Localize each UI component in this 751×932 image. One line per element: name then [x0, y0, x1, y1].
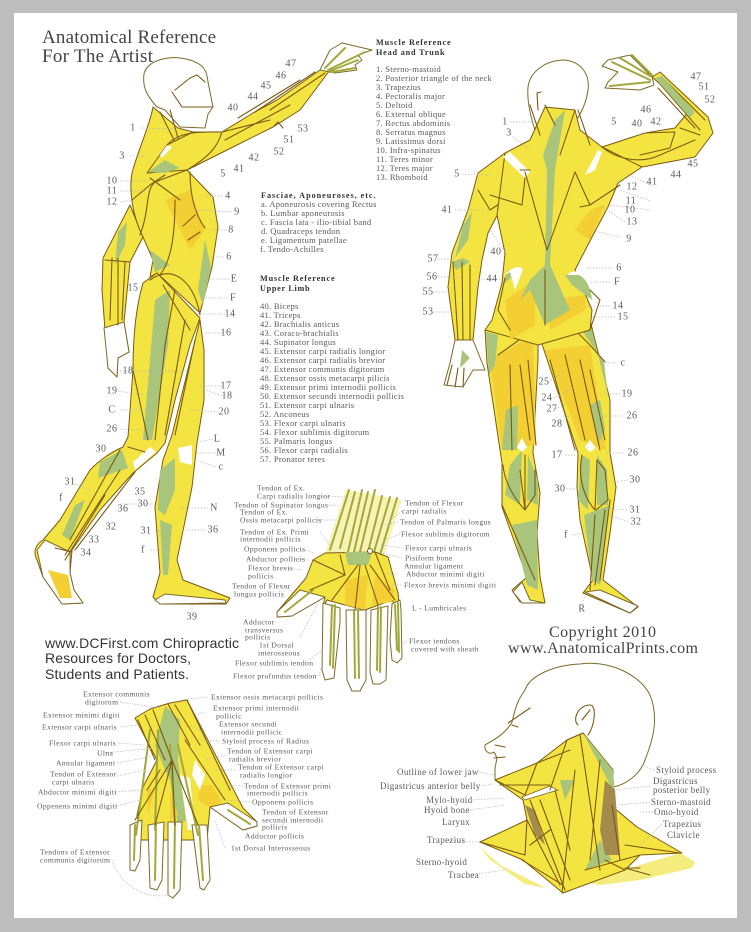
- figure labels: back view: 57: [428, 254, 438, 264]
- labels: palm of hand: pollicis: [245, 632, 270, 642]
- figure labels: side view: 10: [106, 176, 118, 186]
- figure labels: side view: 9: [234, 206, 240, 218]
- head outline: [528, 60, 588, 130]
- palm: [277, 552, 400, 617]
- text block: fasciae and aponeuroses: [260, 191, 377, 254]
- text block: muscle reference head and trunk: 6. External oblique: [376, 109, 446, 119]
- figure labels: back view: 32: [630, 516, 642, 528]
- figure labels: back view: 14: [612, 300, 624, 312]
- text block: muscle reference upper limb: [260, 274, 404, 464]
- labels: palm of hand: Annular ligament: [404, 562, 464, 570]
- labels: back of hand: pollicic: [216, 712, 242, 720]
- labels: back of hand: radialis longior: [240, 770, 292, 780]
- forearm tendons: [325, 490, 402, 556]
- head outline: [144, 58, 213, 128]
- figure labels: back view: 53: [422, 306, 434, 318]
- figure labels: back view: 46: [640, 104, 652, 116]
- labels: palm of hand: Ossis metacarpi pollicis: [240, 516, 322, 524]
- labels: head and neck: Sterno-mastoid: [651, 797, 711, 807]
- figure labels: side view: 16: [220, 328, 232, 338]
- title: Anatomical Reference: [42, 27, 216, 48]
- text block: muscle reference head and trunk: 10. Infra-spinatus: [376, 145, 441, 155]
- figure labels: side view: 15: [128, 282, 138, 294]
- figure labels: back view: 30: [630, 474, 640, 486]
- figure labels: back view: F: [614, 276, 620, 288]
- text block: fasciae and aponeuroses: a. Aponeurosis covering Rectus: [261, 199, 377, 209]
- figure labels: back view: 51: [698, 82, 710, 92]
- text block: DCFirst chiropractic resources: Resources for Doctors,: [45, 650, 191, 666]
- labels: head and neck: Trapezius: [663, 819, 701, 829]
- title: [42, 27, 216, 67]
- labels: palm of hand: Carpi radialis longior: [257, 492, 330, 500]
- figure labels: side view: 32: [106, 522, 116, 532]
- figure labels: back view: 44: [670, 170, 682, 180]
- labels: palm of hand: Tendon of Flexor: [405, 498, 464, 508]
- text block: muscle reference head and trunk: 1. Sterno-mastoid: [376, 64, 442, 74]
- figure labels: side view: 40: [228, 102, 238, 114]
- labels: back of hand: Extensor primi internodii: [213, 704, 299, 712]
- labels: back of hand: Flexor carpi ulnaris: [49, 738, 116, 748]
- hanging arm: [102, 205, 143, 377]
- raised hand: [320, 43, 372, 73]
- labels: back of hand: Extensor secundi: [219, 720, 277, 728]
- labels: back of hand: Annular ligament: [56, 758, 116, 768]
- figure labels: back view: 41: [646, 176, 658, 188]
- text block: muscle reference upper limb: 53. Flexor carpi ulnaris: [260, 418, 346, 428]
- figure labels: back view: 40: [632, 118, 642, 130]
- labels: back of hand: Tendon of Extensor carpi: [227, 746, 313, 756]
- labels: head and neck: Trachea: [448, 870, 479, 880]
- text block: copyright: [508, 624, 699, 657]
- figure labels: side view: 33: [88, 534, 100, 546]
- labels: palm of hand: Adductor: [243, 618, 275, 626]
- labels: back of hand: carpi ulnaris: [52, 778, 95, 786]
- figure labels: side view: 34: [80, 548, 92, 558]
- figure labels: side view: 26: [106, 424, 118, 434]
- figure labels: side view: 30: [138, 498, 148, 510]
- trunk: [131, 107, 218, 313]
- figure labels: side view: F: [230, 292, 236, 304]
- text block: muscle reference upper limb: 57. Pronator teres: [260, 454, 325, 464]
- fingers: [322, 603, 340, 680]
- labels: back of hand: Opponens pollicis: [252, 798, 314, 806]
- figure labels: back view: 27: [546, 404, 558, 414]
- figure labels: back view: f: [564, 530, 568, 540]
- labels: head and neck: Digastricus: [653, 776, 698, 786]
- labels: palm of hand: Tendon of Palmaris longus: [400, 518, 491, 526]
- figure labels: side view: 42: [248, 152, 260, 164]
- figure labels: back view: 47: [690, 72, 702, 82]
- text block: muscle reference head and trunk: 13. Rhomboid: [376, 172, 428, 182]
- figure labels: side view: 52: [274, 146, 284, 158]
- text block: muscle reference head and trunk: Head and Trunk: [376, 48, 445, 57]
- figure labels: side view: f: [59, 492, 63, 504]
- fingers: [130, 820, 142, 871]
- figure labels: side view: [59, 58, 308, 622]
- labels: palm of hand: Tendon of Ex.: [257, 484, 305, 492]
- figure labels: side view: C: [108, 404, 116, 416]
- figure: head and neck: [480, 663, 695, 893]
- labels: palm of hand: Opponens pollicis: [244, 544, 306, 554]
- text block: muscle reference head and trunk: 9. Latissimus dorsi: [376, 136, 446, 146]
- labels: palm of hand: Flexor sublimis tendon: [235, 658, 313, 668]
- figure labels: back view: 52: [704, 94, 716, 106]
- figure labels: side view: M: [216, 448, 226, 458]
- right hanging arm: [448, 153, 505, 340]
- raised arm: [147, 70, 330, 173]
- labels: back of hand: Tendon of Extensor: [50, 770, 117, 778]
- text block: muscle reference head and trunk: 5. Deltoid: [376, 100, 413, 110]
- figure labels: back view: 41: [442, 204, 452, 216]
- figure labels: back view: 26: [626, 410, 638, 422]
- figure labels: back view: 6: [616, 262, 622, 274]
- text block: fasciae and aponeuroses: f. Tendo-Achilles: [260, 244, 324, 254]
- figure labels: back view: 17: [552, 450, 562, 460]
- text block: muscle reference upper limb: 46. Extensor carpi radialis brevior: [260, 355, 385, 365]
- labels: back of hand: Tendon of Extensor primi: [244, 782, 331, 790]
- figure labels: side view: 4: [225, 190, 231, 202]
- labels: back of hand: Ulna: [97, 748, 114, 758]
- figure labels: side view: 41: [234, 164, 244, 174]
- trunk: [485, 107, 642, 345]
- labels: back of hand: Extensor carpi ulnaris: [42, 722, 117, 732]
- figure labels: side view: 5: [220, 168, 226, 180]
- figure labels: side view: 18: [222, 390, 232, 402]
- figure labels: side view: 35: [134, 486, 146, 498]
- labels: palm of hand: L - Lumbricales: [412, 604, 466, 612]
- title: For The Artist: [42, 46, 154, 67]
- figure labels: side view: 39: [186, 612, 198, 622]
- figure labels: side view: 47: [286, 58, 296, 70]
- neck muscles: [480, 733, 682, 893]
- labels: palm of hand: Tendon of Flexor: [232, 582, 291, 590]
- text block: muscle reference upper limb: 47. Extensor communis digitorum: [260, 364, 385, 374]
- text block: fasciae and aponeuroses: c. Fascia lata - ilio-tibial band: [261, 217, 372, 227]
- labels: back of hand: Abductor minimi digiti: [38, 788, 117, 796]
- figure labels: back view: 24: [542, 392, 552, 404]
- figure labels: back view: [422, 72, 716, 614]
- text block: fasciae and aponeuroses: b. Lumbar aponeurosis: [261, 208, 345, 218]
- face details: [172, 75, 212, 107]
- wrist and back of hand: [135, 700, 257, 840]
- figure labels: back view: 26: [628, 448, 638, 458]
- figure labels: back view: 13: [626, 216, 638, 228]
- text block: muscle reference upper limb: 50. Extensor secundi internodii pollicis: [260, 391, 404, 401]
- figure labels: side view: c: [219, 462, 224, 472]
- figure: back view: [444, 55, 713, 613]
- labels: back of hand: Adductor pollicis: [245, 832, 304, 840]
- labels: palm of hand: covered with sheath: [411, 644, 479, 654]
- labels: palm of hand: Flexor brevis: [248, 564, 293, 572]
- figure labels: side view: L: [214, 434, 220, 444]
- labels: head and neck: Clavicle: [667, 830, 700, 840]
- figure labels: side view: 31: [64, 476, 76, 488]
- figure labels: side view: 6: [226, 252, 232, 262]
- figure labels: back view: 12: [626, 182, 638, 192]
- figure labels: back view: 15: [618, 312, 628, 322]
- ear: [576, 705, 594, 735]
- figure labels: side view: 3: [119, 150, 125, 162]
- labels: palm of hand: Flexor brevis minimi digiti: [404, 580, 496, 590]
- text block: muscle reference head and trunk: 8. Serratus magnus: [376, 127, 446, 137]
- figure labels: back view: 28: [552, 418, 562, 430]
- text block: muscle reference upper limb: 48. Extensor ossis metacarpi pilicis: [260, 373, 390, 383]
- labels: head and neck: Trapezius: [427, 835, 465, 845]
- labels: back of hand: Oppenens minimi digiti: [37, 802, 118, 810]
- text block: copyright: www.AnatomicalPrints.com: [508, 640, 699, 657]
- text block: muscle reference upper limb: 52. Anconeus: [260, 409, 310, 419]
- labels: back of hand: 1st Dorsal Interosseous: [231, 844, 311, 852]
- text block: muscle reference upper limb: 42. Brachialis anticus: [260, 319, 339, 329]
- figure labels: side view: 45: [260, 80, 272, 92]
- labels: palm of hand: interosseous: [258, 648, 300, 658]
- standing leg: [153, 320, 230, 604]
- labels: back of hand: internodii pollicis: [247, 788, 308, 798]
- raised arm: [602, 72, 713, 167]
- labels: head and neck: Digastricus anterior belly: [380, 781, 481, 791]
- figure labels: side view: 51: [284, 134, 294, 146]
- text block: muscle reference head and trunk: 4. Pectoralis major: [376, 91, 445, 101]
- labels: palm of hand: Tendon of Ex.: [240, 508, 288, 516]
- figure labels: back view: 40: [490, 246, 502, 258]
- text block: muscle reference head and trunk: 11. Teres minor: [376, 154, 433, 164]
- figure labels: back view: c: [621, 358, 626, 368]
- labels: back of hand: digitorum: [85, 698, 118, 706]
- figure labels: back view: R: [578, 604, 586, 614]
- figure labels: side view: E: [231, 274, 237, 284]
- labels: head and neck: Larynx: [442, 817, 470, 827]
- text block: muscle reference upper limb: 49. Extensor primi internodii pollicis: [260, 382, 396, 392]
- labels: back of hand: Styloid process of Radius: [222, 736, 309, 746]
- labels: head and neck: Omo-hyoid: [654, 807, 699, 817]
- labels: palm of hand: Pisiform bone: [405, 554, 453, 562]
- figure labels: back view: 30: [554, 484, 566, 494]
- raised hand: [602, 55, 654, 90]
- figure labels: back view: 10: [624, 204, 636, 216]
- labels: palm of hand: Abductor minimi digiti: [406, 570, 485, 578]
- text block: muscle reference head and trunk: [376, 38, 493, 182]
- figure labels: back view: 3: [506, 128, 512, 138]
- figure labels: back view: 45: [688, 158, 698, 170]
- labels: back of hand: internodii pollicic: [221, 728, 283, 736]
- labels: palm of hand: [232, 484, 496, 680]
- text block: muscle reference upper limb: 43. Coraco-brachialis: [260, 328, 339, 338]
- figure labels: side view: 1: [130, 122, 136, 134]
- labels: back of hand: pollicis: [262, 822, 287, 832]
- figure labels: back view: 19: [622, 388, 632, 400]
- text block: muscle reference upper limb: 55. Palmaris longus: [260, 436, 332, 446]
- figure labels: back view: 5: [454, 168, 460, 180]
- labels: back of hand: Tendons of Extensor: [40, 848, 110, 856]
- figure: back of hand: [130, 700, 257, 898]
- figure: side view running man: [35, 43, 372, 604]
- text block: muscle reference head and trunk: 2. Posterior triangle of the neck: [376, 73, 493, 83]
- labels: palm of hand: Tendon of Supinator longus: [234, 500, 328, 510]
- text block: fasciae and aponeuroses: Fasciae, Aponeuroses, etc.: [261, 191, 376, 200]
- figure labels: back view: 5: [611, 116, 617, 128]
- figure labels: side view: 8: [228, 224, 234, 236]
- figure labels: side view: 20: [218, 406, 230, 418]
- figure labels: side view: 53: [298, 124, 308, 134]
- head outline: [485, 663, 655, 787]
- text block: copyright: Copyright 2010: [549, 624, 656, 641]
- figure labels: side view: 12: [106, 196, 118, 208]
- figure labels: back view: 56: [426, 272, 438, 282]
- labels: head and neck: Sterno-hyoid: [416, 857, 467, 867]
- text block: muscle reference head and trunk: 3. Trapezius: [376, 82, 421, 92]
- figure labels: back view: 55: [422, 286, 434, 298]
- figure labels: back view: 25: [538, 376, 550, 388]
- labels: back of hand: Tendon of Extensor: [262, 808, 329, 816]
- labels: palm of hand: carpi radialis: [402, 506, 447, 516]
- figure labels: back view: 11: [626, 196, 636, 206]
- labels: head and neck: posterior belly: [653, 785, 711, 795]
- text block: muscle reference upper limb: 41. Triceps: [260, 310, 301, 320]
- pale skin below neck: [480, 847, 695, 888]
- labels: back of hand: communis digitorum: [40, 856, 110, 864]
- labels: palm of hand: Abductor pollicis: [246, 554, 305, 564]
- figure labels: back view: 42: [650, 116, 662, 128]
- figure labels: side view: 19: [106, 386, 118, 396]
- text block: muscle reference upper limb: 54. Flexor sublimis digitorum: [260, 427, 369, 437]
- labels: back of hand: Extensor communis: [83, 690, 150, 698]
- text block: muscle reference upper limb: Muscle Reference: [260, 274, 335, 283]
- labels: back of hand: Extensor ossis metacarpi pollicis: [211, 692, 323, 702]
- text block: muscle reference upper limb: Upper Limb: [260, 284, 310, 293]
- text block: muscle reference upper limb: 45. Extensor carpi radialis longior: [260, 346, 385, 356]
- eye and mouth: [494, 708, 530, 758]
- figure labels: side view: 11: [107, 186, 117, 196]
- text block: DCFirst chiropractic resources: www.DCFirst.com Chiropractic: [44, 635, 239, 651]
- figure labels: side view: 30: [96, 444, 106, 454]
- text block: muscle reference upper limb: 56. Flexor carpi radialis: [260, 445, 348, 455]
- figure labels: side view: 18: [122, 366, 134, 376]
- labels: palm of hand: internodii pollicis: [240, 534, 301, 544]
- labels: back of hand: secundi internodii: [262, 816, 323, 824]
- labels: back of hand: radialis brevior: [229, 754, 281, 764]
- text block: muscle reference upper limb: 51. Extensor carpi ulnaris: [260, 400, 354, 410]
- labels: palm of hand: Tendon of Ex. Primi: [240, 528, 309, 536]
- text block: DCFirst chiropractic resources: [44, 635, 239, 682]
- labels: head and neck: Hyoid bone: [424, 805, 470, 815]
- figure labels: side view: 31: [140, 526, 152, 536]
- labels: head and neck: Styloid process: [656, 765, 717, 775]
- labels: back of hand: [37, 690, 331, 896]
- labels: palm of hand: Flexor tendons: [409, 636, 460, 646]
- figure labels: side view: 14: [224, 308, 236, 320]
- labels: palm of hand: Flexor sublimis digitorum: [401, 530, 490, 538]
- labels: palm of hand: longus pollicis: [234, 590, 284, 598]
- figure labels: side view: 44: [248, 92, 258, 102]
- figure labels: side view: N: [210, 502, 218, 514]
- text block: muscle reference upper limb: 40. Biceps: [260, 301, 299, 311]
- figure labels: side view: 36: [208, 524, 218, 536]
- labels: head and neck: [380, 765, 717, 880]
- text block: muscle reference head and trunk: 7. Rectus abdominis: [376, 118, 450, 128]
- rear leg: [35, 273, 200, 604]
- figure labels: back view: 9: [626, 234, 632, 244]
- ear and neck detail: [537, 92, 541, 110]
- figure labels: side view: f: [141, 544, 145, 556]
- figure labels: side view: 46: [276, 70, 286, 82]
- labels: palm of hand: Flexor profundus tendon: [233, 672, 317, 680]
- lower legs and thighs: [485, 330, 545, 603]
- labels: palm of hand: transversus: [245, 626, 283, 634]
- figure labels: side view: 36: [118, 504, 128, 514]
- text block: muscle reference upper limb: 44. Supinator longus: [260, 337, 336, 347]
- labels: back of hand: Tendon of Extensor carpi: [238, 762, 324, 772]
- labels: palm of hand: pollicis: [248, 572, 273, 580]
- figure labels: back view: 1: [502, 116, 508, 128]
- labels: head and neck: Mylo-hyoid: [426, 795, 473, 805]
- figure: palm of hand: [277, 490, 402, 691]
- figure labels: side view: 17: [220, 380, 232, 392]
- text block: muscle reference head and trunk: Muscle Reference: [376, 38, 451, 47]
- labels: back of hand: Extensor minimi digiti: [43, 710, 120, 720]
- text block: fasciae and aponeuroses: d. Quadraceps tendon: [261, 226, 341, 236]
- labels: head and neck: Outline of lower jaw: [397, 767, 479, 777]
- text block: fasciae and aponeuroses: e. Ligamentum patellae: [261, 235, 347, 245]
- figure labels: back view: 31: [630, 504, 640, 516]
- labels: palm of hand: 1st Dorsal: [259, 640, 294, 650]
- text block: muscle reference head and trunk: 12. Teres major: [376, 163, 433, 173]
- text block: DCFirst chiropractic resources: Students and Patients.: [45, 666, 189, 682]
- figure labels: back view: 44: [486, 274, 498, 284]
- labels: palm of hand: Flexor carpi ulnaris: [405, 544, 472, 552]
